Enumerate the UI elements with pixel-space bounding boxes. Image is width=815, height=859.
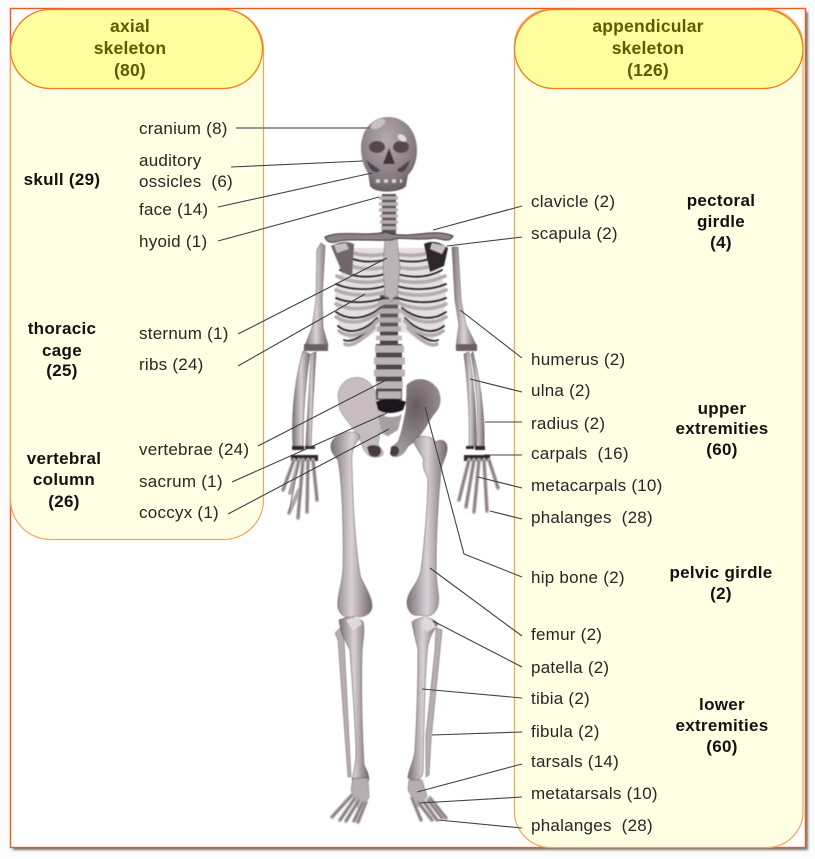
left foot — [332, 778, 369, 822]
group: vertebral column — [27, 449, 101, 511]
right hand — [459, 460, 498, 512]
group: upper extremities: extremities — [675, 419, 769, 438]
spine — [374, 194, 405, 400]
group: vertebral column: column — [33, 470, 95, 489]
heading: appendicular skeleton — [514, 10, 803, 88]
pelvis — [338, 378, 440, 457]
heading: axial skeleton: axial — [110, 16, 150, 36]
heading: axial skeleton: (80) — [114, 60, 146, 80]
labels: appendicular bones: patella (2) — [531, 658, 609, 677]
sternum — [383, 238, 400, 302]
right femur — [407, 436, 447, 616]
labels: appendicular bones — [531, 192, 663, 835]
group: skull: skull (29) — [24, 170, 100, 189]
labels: appendicular bones: metacarpals (10) — [531, 476, 663, 495]
labels: appendicular bones: femur (2) — [531, 625, 602, 644]
skull — [361, 117, 417, 192]
group: thoracic cage — [28, 319, 96, 380]
group: lower extremities: (60) — [706, 737, 738, 756]
labels: axial bones: auditory — [139, 151, 202, 170]
arm bones left — [291, 243, 328, 461]
labels: appendicular bones: humerus (2) — [531, 350, 625, 369]
left tibia and fibula — [335, 616, 369, 782]
group: lower extremities: lower — [699, 695, 745, 714]
group: thoracic cage: (25) — [46, 361, 78, 380]
group: thoracic cage: cage — [42, 341, 82, 360]
labels: axial bones: sternum (1) — [139, 324, 229, 343]
labels: appendicular bones: phalanges (28) — [531, 816, 653, 835]
labels: axial bones: vertebrae (24) — [139, 440, 249, 459]
group: pelvic girdle — [669, 563, 773, 603]
labels: appendicular bones: hip bone (2) — [531, 568, 625, 587]
group: pectoral girdle — [687, 191, 755, 252]
labels: appendicular bones: ulna (2) — [531, 381, 591, 400]
group: pelvic girdle: pelvic girdle — [669, 563, 773, 582]
skeleton figure — [283, 117, 498, 822]
labels: appendicular bones: phalanges (28) — [531, 508, 653, 527]
labels: axial bones: ribs (24) — [139, 355, 204, 374]
labels: axial bones: coccyx (1) — [139, 503, 219, 522]
labels: appendicular bones: fibula (2) — [531, 722, 600, 741]
right foot — [408, 780, 446, 820]
labels: axial bones: face (14) — [139, 200, 208, 219]
heading: appendicular skeleton: skeleton — [612, 38, 684, 58]
labels: axial bones: ossicles (6) — [139, 172, 233, 191]
heading: axial skeleton: skeleton — [94, 38, 166, 58]
group: pectoral girdle: girdle — [697, 212, 745, 231]
labels: axial bones: hyoid (1) — [139, 232, 207, 251]
leader lines — [218, 128, 522, 828]
arm bones right — [452, 247, 490, 461]
labels: axial bones: cranium (8) — [139, 119, 228, 138]
group: vertebral column: vertebral — [27, 449, 101, 468]
group: upper extremities — [675, 399, 769, 459]
clavicles and scapulae — [325, 232, 453, 276]
labels: axial bones — [139, 119, 249, 522]
group: pectoral girdle: (4) — [710, 233, 732, 252]
heading: axial skeleton — [10, 10, 262, 88]
group: upper extremities: upper — [698, 399, 746, 418]
labels: appendicular bones: scapula (2) — [531, 224, 618, 243]
group: thoracic cage: thoracic — [28, 319, 96, 338]
labels: appendicular bones: clavicle (2) — [531, 192, 615, 211]
panel: axial skeleton — [10, 10, 264, 540]
labels: axial bones: sacrum (1) — [139, 472, 223, 491]
group: lower extremities: extremities — [675, 716, 769, 735]
ribcage — [335, 238, 446, 346]
heading: appendicular skeleton: appendicular — [592, 16, 704, 36]
labels: appendicular bones: tibia (2) — [531, 689, 590, 708]
heading: appendicular skeleton: (126) — [627, 60, 669, 80]
labels: appendicular bones: carpals (16) — [531, 444, 629, 463]
group: upper extremities: (60) — [706, 440, 738, 459]
panel: appendicular skeleton — [514, 10, 803, 848]
labels: appendicular bones: radius (2) — [531, 414, 605, 433]
left hand — [283, 460, 317, 518]
group: vertebral column: (26) — [48, 492, 80, 511]
labels: appendicular bones: metatarsals (10) — [531, 784, 658, 803]
group: lower extremities — [675, 695, 769, 756]
right tibia and fibula — [408, 617, 442, 781]
labels: appendicular bones: tarsals (14) — [531, 752, 619, 771]
group: pectoral girdle: pectoral — [687, 191, 755, 210]
left femur — [331, 432, 372, 618]
group: pelvic girdle: (2) — [710, 584, 732, 603]
